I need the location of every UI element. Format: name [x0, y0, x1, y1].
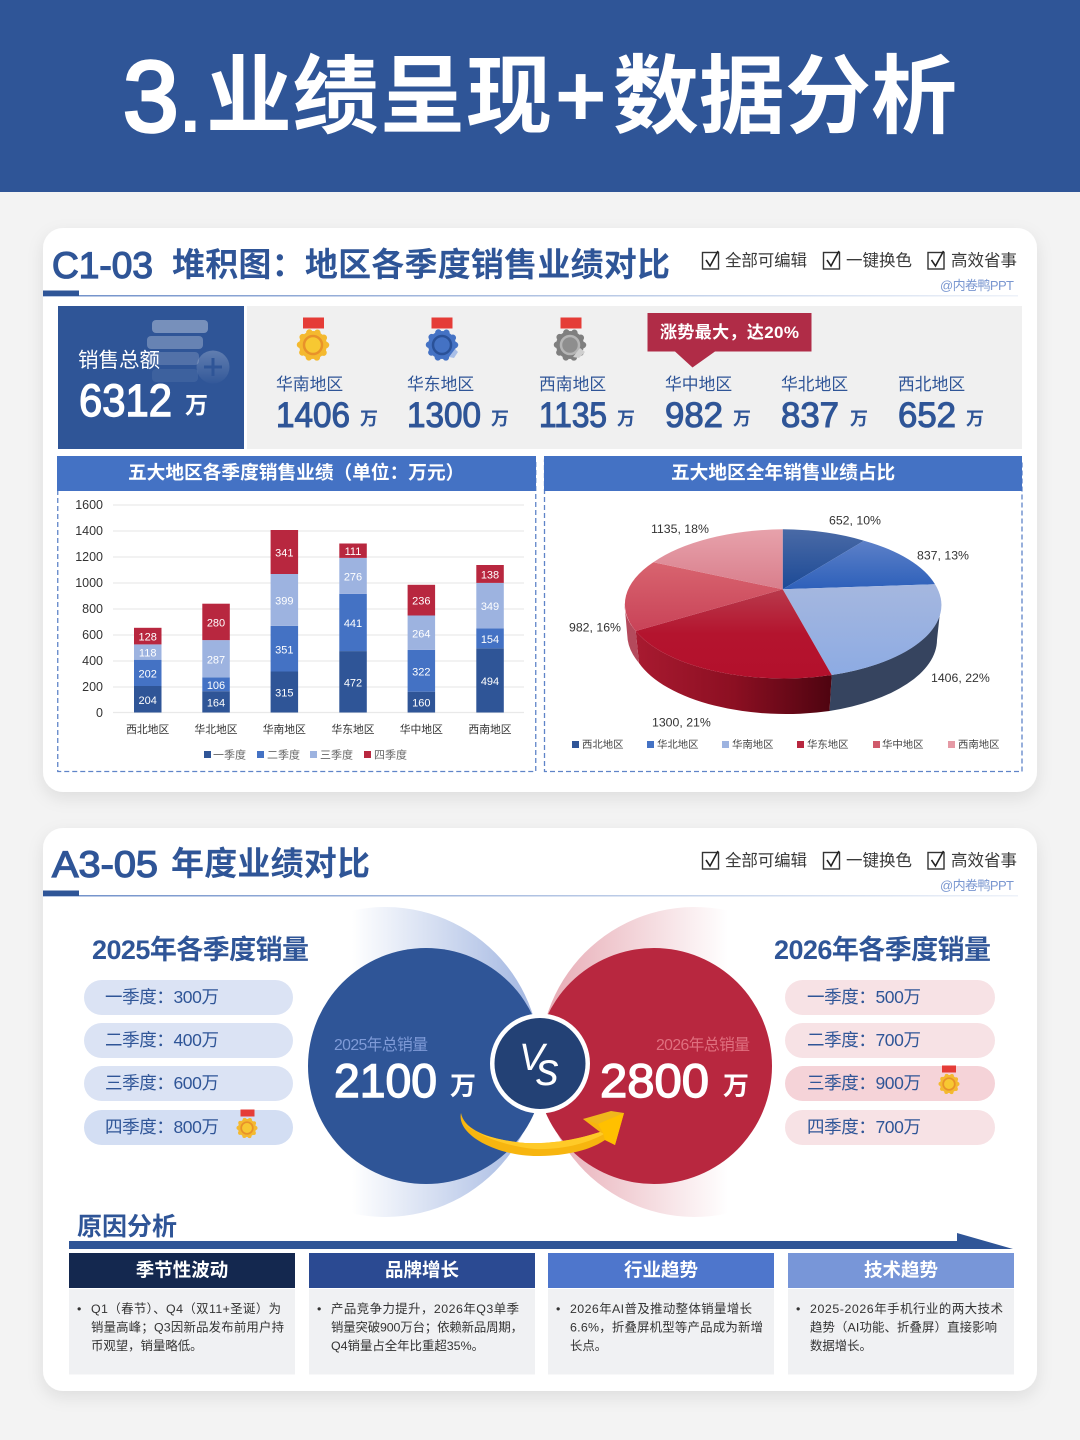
bar chart: 106: [207, 680, 225, 692]
title: 3: [123, 41, 179, 153]
circle: 2025 total: [308, 948, 544, 1184]
KPI: 西南地区: 1135: [539, 396, 607, 435]
column: brand: 品牌增长: [385, 1260, 459, 1280]
icon: medal: [238, 1110, 256, 1137]
panel: A3-05 annual comparison card: [43, 828, 1037, 1391]
bar chart: 西南地区: [468, 723, 512, 736]
KPI: 华北地区: 837: [781, 396, 839, 435]
bar chart: 164: [207, 698, 225, 710]
KPI: 西北地区: [898, 375, 984, 435]
pie legend: 西南地区: [958, 738, 1000, 751]
pie legend: 华东地区: [807, 738, 849, 751]
pill: Q4 2026: [785, 1110, 995, 1145]
bar chart: 1600: [75, 498, 103, 512]
bar chart: 118: [139, 648, 156, 660]
panel heading: bar chart: [57, 456, 536, 491]
bar chart: 1200: [75, 550, 103, 564]
title: [123, 41, 957, 153]
column: technology: 2025-2026年手机行业的两大技术: [810, 1301, 1003, 1316]
column: industry: 行业趋势: [624, 1260, 698, 1280]
badge: VS: [490, 1014, 590, 1114]
right column: 2026 quarterly sales: 2026年各季度销量: [774, 935, 991, 965]
feature checkboxes: [702, 851, 1017, 893]
3D pie chart: [624, 529, 941, 714]
KPI: 华东地区: 华东地区: [407, 375, 474, 394]
pie data labels: 652, 10%: [829, 514, 881, 528]
bar chart: 600: [82, 628, 103, 642]
bar chart: 西北地区: [126, 723, 169, 736]
KPI: 华中地区: [665, 375, 751, 435]
bar chart: 204: [139, 695, 157, 707]
bar chart: 441: [344, 618, 362, 630]
bar chart: 111: [345, 546, 361, 558]
feature checkboxes: 一键换色: [846, 251, 912, 270]
arrow: growth: [461, 1111, 624, 1156]
KPI: 华东地区: 万: [491, 409, 509, 429]
KPI: 华北地区: [781, 375, 868, 435]
panel heading: pie chart: 五大地区全年销售业绩占比: [671, 462, 895, 483]
pill: Q4 2026: 四季度：700万: [807, 1117, 921, 1137]
column: industry: 6.6%，折叠屏机型等产品成为新增: [570, 1320, 763, 1334]
title banner: [0, 0, 1080, 192]
KPI: 华北地区: 华北地区: [781, 375, 848, 394]
heading: C1-03: C1-03: [52, 245, 153, 286]
KPI: 西北地区: 西北地区: [898, 375, 965, 394]
bar chart: 280: [207, 618, 225, 630]
pill: Q3 2025: [84, 1066, 293, 1101]
bar chart: 华中地区: [400, 722, 443, 736]
pie legend: 华中地区: [882, 738, 924, 751]
bar chart: 华东地区: [331, 722, 375, 736]
pie legend: 华北地区: [657, 738, 699, 751]
KPI: 西南地区: 西南地区: [539, 375, 606, 394]
bar chart legend: 三季度: [320, 748, 353, 762]
bar chart: 1400: [75, 524, 103, 538]
callout: biggest growth: [648, 313, 812, 368]
bar chart: 128: [139, 632, 157, 644]
bar chart: 154: [481, 634, 499, 646]
KPI: 华中地区: 华中地区: [665, 375, 732, 394]
feature checkboxes: 高效省事: [951, 851, 1017, 870]
panel: total sales: 6312: [79, 375, 172, 426]
versus graphic: [308, 907, 772, 1217]
bar chart: 0: [96, 706, 103, 720]
column: brand: 产品竞争力提升，2026年Q3单季: [331, 1301, 519, 1316]
column: technology: 趋势（AI功能、折叠屏）直接影响: [810, 1320, 997, 1334]
column: technology: •: [796, 1302, 800, 1316]
pill: Q2 2025: [84, 1023, 293, 1058]
icon: stacked database plus: [147, 320, 230, 384]
heading: A3-05: [52, 844, 370, 885]
feature checkboxes: @内卷鸭PPT: [940, 278, 1014, 293]
circle: 2026 total: 2026年总销量: [656, 1036, 750, 1054]
bar chart legend: [204, 748, 407, 762]
KPI: 华中地区: 982: [665, 396, 723, 435]
circle: 2025 total: 2100: [334, 1054, 437, 1107]
KPI: 华东地区: [407, 375, 509, 435]
bar chart: [75, 498, 524, 736]
circle: 2025 total: 2025年总销量: [334, 1036, 428, 1054]
bar chart legend: 一季度: [213, 748, 246, 762]
KPI: 西北地区: 652: [898, 396, 956, 435]
arrow: timeline bar: [69, 1233, 1013, 1249]
badge: VS: V: [519, 1037, 548, 1079]
pill: Q2 2026: [785, 1023, 995, 1058]
bar chart: 341: [275, 548, 293, 560]
icon: silver medal: [556, 318, 585, 359]
column: seasonal: [69, 1253, 295, 1374]
circle: 2026 total: 2800: [600, 1054, 709, 1107]
panel heading: bar chart: 五大地区各季度销售业绩（单位：万元）: [128, 462, 464, 483]
column: technology: [788, 1253, 1014, 1374]
KPI strip background: [247, 306, 1022, 449]
heading: cause analysis: 原因分析: [77, 1213, 177, 1241]
left column: 2025 quarterly sales: [84, 935, 309, 1145]
pill: Q3 2026: [785, 1066, 995, 1101]
icon: blue medal: [428, 318, 458, 359]
pie legend: 华南地区: [732, 738, 774, 751]
bar chart legend: 四季度: [374, 748, 407, 762]
feature checkboxes: [702, 251, 1017, 293]
right column: 2026 quarterly sales: [774, 935, 995, 1145]
bar chart: 494: [481, 676, 499, 688]
bar chart: 202: [139, 668, 157, 680]
KPI: 华东地区: 1300: [407, 396, 481, 435]
bar chart: 264: [412, 628, 430, 640]
bar chart: 287: [207, 654, 225, 666]
bar chart: 472: [344, 678, 362, 690]
column: seasonal: 销量高峰；Q3因新品发布前用户持: [91, 1320, 284, 1334]
panel: stacked bar chart: [57, 456, 536, 772]
panel: pie chart: [544, 456, 1022, 772]
column: seasonal: Q1（春节）、Q4（双11+圣诞）为: [91, 1302, 281, 1316]
bar chart: 160: [412, 698, 430, 710]
column: seasonal: 币观望，销量略低。: [91, 1338, 203, 1353]
panel: total sales: 万: [185, 392, 208, 418]
pill: Q2 2025: 二季度：400万: [105, 1030, 219, 1050]
pill: Q1 2026: [785, 980, 995, 1015]
pie data labels: [569, 514, 990, 730]
title: +: [555, 46, 606, 145]
pie legend: 西北地区: [582, 738, 624, 751]
heading: A3-05: 年度业绩对比: [171, 845, 370, 882]
column: technology: 数据增长。: [810, 1338, 872, 1353]
column: brand: [309, 1253, 535, 1374]
column: industry: [548, 1253, 774, 1374]
KPI: 华南地区: 1406: [276, 396, 350, 435]
pill: Q1 2026: 一季度：500万: [807, 987, 921, 1007]
bar chart: 华南地区: [263, 722, 306, 736]
pie data labels: 1300, 21%: [652, 716, 711, 730]
title: .: [178, 51, 202, 150]
left column: 2025 quarterly sales: 2025年各季度销量: [92, 935, 309, 965]
badge: VS: s: [536, 1043, 559, 1095]
pill: Q4 2025: [84, 1110, 293, 1145]
bar chart: 322: [412, 666, 430, 678]
column: technology: 技术趋势: [864, 1260, 938, 1280]
bar chart: 236: [412, 596, 430, 608]
panel: C1-03 stacked chart card: [43, 228, 1037, 792]
title: 业绩呈现: [206, 49, 552, 145]
title: 数据分析: [613, 49, 957, 145]
column: brand: 销量突破900万台；依赖新品周期，: [331, 1320, 523, 1334]
panel: total sales: 销售总额: [78, 349, 160, 372]
bar chart legend: 二季度: [267, 748, 300, 762]
bar chart: 1000: [75, 576, 103, 590]
feature checkboxes: 一键换色: [846, 851, 912, 870]
pill: Q1 2025: [84, 980, 293, 1015]
heading: A3-05: A3-05: [52, 844, 158, 885]
panel: total sales: [58, 306, 244, 449]
KPI: 华中地区: 万: [733, 409, 751, 429]
circle: 2025 total: 万: [450, 1071, 476, 1101]
feature checkboxes: 全部可编辑: [725, 851, 807, 870]
pill: Q1 2025: 一季度：300万: [105, 987, 219, 1007]
callout: biggest growth: 涨势最大，达20%: [660, 323, 799, 342]
icon: medal: [940, 1066, 958, 1093]
KPI: 西南地区: 万: [617, 409, 635, 429]
circle: 2026 total: [536, 948, 772, 1184]
KPI: 华南地区: [276, 375, 378, 435]
column: seasonal: 季节性波动: [136, 1260, 228, 1280]
column: industry: 2026年AI普及推动整体销量增长: [570, 1301, 752, 1316]
bar chart: 800: [82, 602, 103, 616]
bar chart: 200: [82, 680, 103, 694]
bar chart: 华北地区: [194, 722, 238, 736]
pill: Q3 2026: 三季度：900万: [807, 1073, 921, 1093]
pie data labels: 1406, 22%: [931, 671, 990, 685]
pill: Q4 2025: 四季度：800万: [105, 1117, 219, 1137]
KPI: 华南地区: 万: [360, 409, 378, 429]
bar chart: 349: [481, 601, 499, 613]
column: industry: 长点。: [570, 1339, 607, 1353]
pill: Q2 2026: 二季度：700万: [807, 1030, 921, 1050]
KPI: 华南地区: 华南地区: [276, 375, 343, 394]
KPI: 华北地区: 万: [850, 409, 868, 429]
feature checkboxes: 全部可编辑: [725, 251, 807, 270]
panel heading: pie chart: [544, 456, 1022, 491]
icon: gold medal: [299, 318, 327, 359]
bar chart: 400: [82, 654, 103, 668]
pill: Q3 2025: 三季度：600万: [105, 1073, 219, 1093]
KPI: 西北地区: 万: [966, 409, 984, 429]
bar chart: 399: [275, 596, 293, 608]
bar chart: 138: [481, 570, 499, 582]
pie legend: [572, 738, 1000, 751]
pie data labels: 982, 16%: [569, 620, 621, 634]
column: brand: •: [317, 1302, 321, 1316]
KPI: 西南地区: [539, 375, 635, 435]
bar chart: 276: [344, 572, 362, 584]
column: industry: •: [556, 1302, 560, 1316]
heading: C1-03: 堆积图：地区各季度销售业绩对比: [172, 246, 670, 283]
feature checkboxes: 高效省事: [951, 251, 1017, 270]
column: brand: Q4销量占全年比重超35%。: [331, 1338, 484, 1353]
circle: 2026 total: 万: [723, 1071, 749, 1101]
column: seasonal: •: [77, 1302, 81, 1316]
pie data labels: 837, 13%: [917, 548, 969, 562]
bar chart: 351: [275, 644, 293, 656]
bar chart: 315: [275, 688, 293, 700]
feature checkboxes: @内卷鸭PPT: [940, 878, 1014, 893]
pie data labels: 1135, 18%: [651, 522, 709, 536]
